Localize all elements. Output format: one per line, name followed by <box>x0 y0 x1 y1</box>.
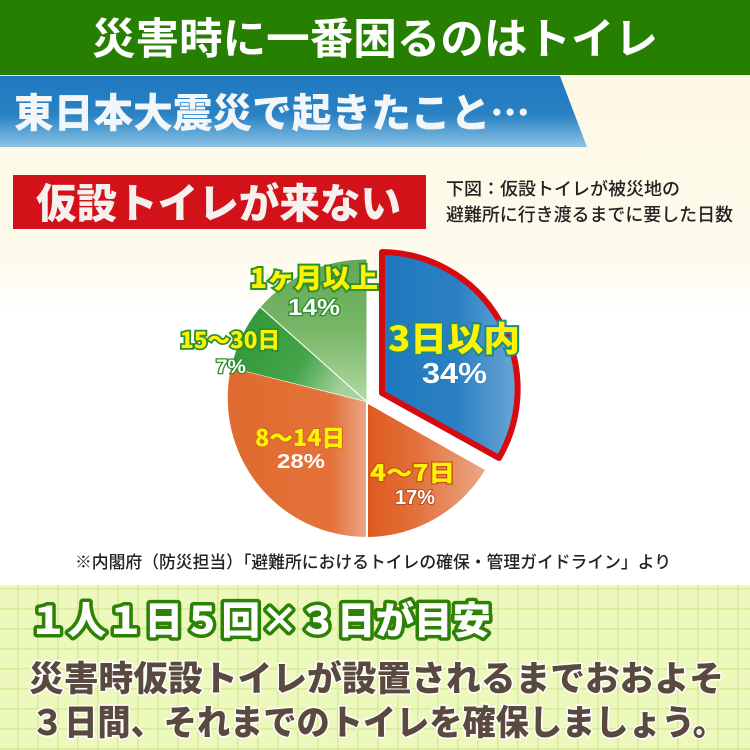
label: within 3 days: 3日以内 <box>388 312 520 361</box>
text block: chart description: 下図：仮設トイレが被災地の <box>446 175 680 201</box>
label: 1 month or more: 14% <box>288 294 340 320</box>
label: 4-7 days: 17% <box>395 487 435 509</box>
heading: guideline: １人１日５回×３日が目安 <box>29 590 491 645</box>
text block: explanation: 災害時仮設トイレが設置されるまでおおよそ <box>29 651 724 702</box>
label: 15-30 days: 15～30日 <box>180 323 280 355</box>
label: within 3 days: 34% <box>422 358 487 390</box>
label: within 3 days <box>388 312 520 390</box>
label: 15-30 days <box>180 323 280 378</box>
label: 8-14 days <box>255 419 345 473</box>
heading band: what happened: 東日本大震災で起きたこと… <box>14 81 530 139</box>
slice: 15-30 days <box>231 307 367 402</box>
slice: 1 month or more <box>260 259 367 402</box>
panel: bottom grid background <box>0 585 750 750</box>
header: title bar: 災害時に一番困るのはトイレ <box>92 5 658 67</box>
text block: explanation: ３日間、それまでのトイレを確保しましょう。 <box>31 695 726 746</box>
header: title bar <box>0 0 750 75</box>
callout: red label: 仮設トイレが来ない <box>36 170 401 230</box>
text block: explanation <box>29 651 726 746</box>
label: 1 month or more <box>250 257 378 320</box>
label: 8-14 days: 8～14日 <box>255 419 345 453</box>
label: 15-30 days: 7% <box>216 357 246 378</box>
slice: 4-7 days <box>368 404 485 537</box>
slice: 8-14 days <box>228 368 366 537</box>
label: 4-7 days: 4～7日 <box>370 454 455 488</box>
pie chart <box>180 252 520 537</box>
label: 8-14 days: 28% <box>277 451 325 473</box>
text block: chart description: 避難所に行き渡るまでに要した日数 <box>446 201 733 227</box>
label: 4-7 days <box>370 454 455 509</box>
source note: ※内閣府（防災担当）「避難所におけるトイレの確保・管理ガイドライン」より <box>75 548 671 573</box>
label: 1 month or more: 1ヶ月以上 <box>250 257 378 296</box>
background: cream upper area <box>0 75 750 317</box>
text block: chart description <box>446 175 733 227</box>
slice: within 3 days <box>382 252 518 458</box>
